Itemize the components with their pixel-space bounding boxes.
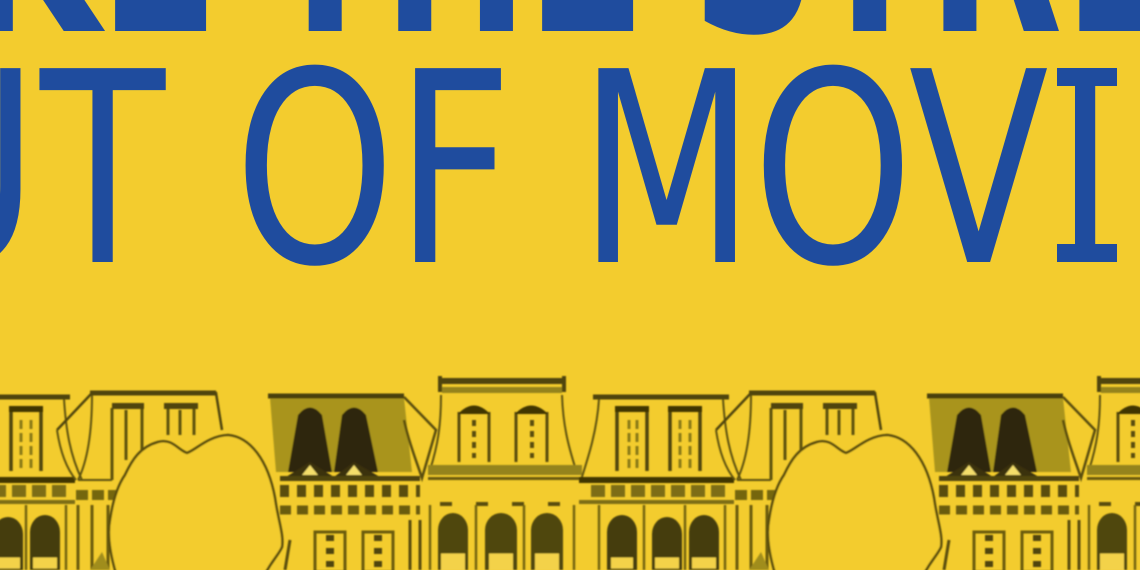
illustration: row of buildings	[0, 376, 1140, 570]
